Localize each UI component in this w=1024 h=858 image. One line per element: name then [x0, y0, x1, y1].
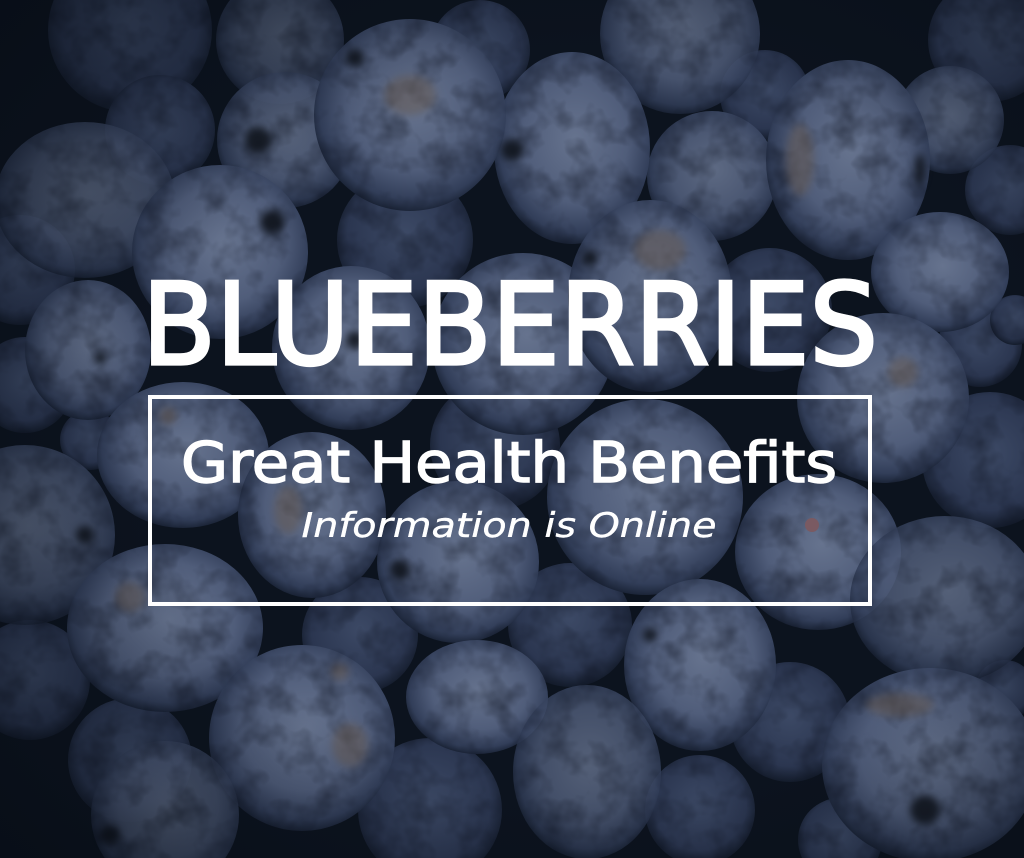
tagline: Information is Online [302, 506, 716, 546]
subtitle frame [150, 397, 870, 604]
berry crowns and spots [76, 49, 940, 845]
heading: great health benefits: Great Health Benefits [181, 431, 837, 496]
red blossom end [805, 518, 819, 532]
title: BLUEBERRIES [142, 259, 878, 391]
